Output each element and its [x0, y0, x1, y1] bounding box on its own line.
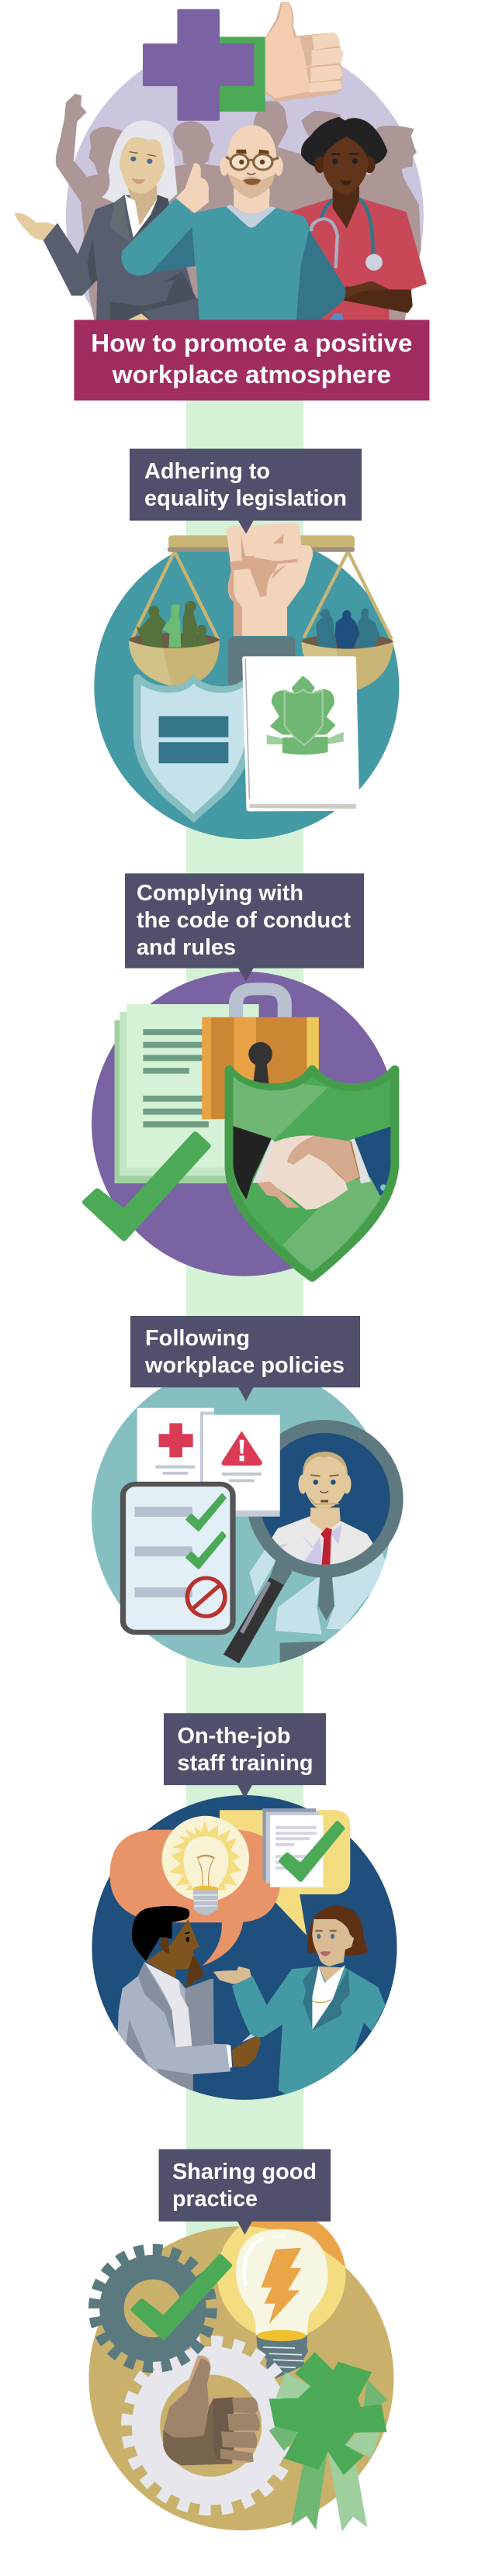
yellow speech bubble	[220, 1810, 350, 1935]
central man giving thumbs up	[121, 125, 345, 319]
orange speech bubble	[110, 1830, 281, 1966]
policies illustration	[92, 1364, 404, 1668]
callout: adhering to equality legislation: Adhering to	[144, 459, 270, 484]
figure in pale coat	[249, 1549, 395, 1666]
training illustration	[92, 1795, 397, 2100]
icon: legislation book	[242, 656, 359, 811]
callout: adhering to equality legislation	[130, 449, 362, 534]
woman in teal suit	[213, 1905, 386, 2094]
icon: dark gear	[94, 2250, 212, 2367]
title banner: How to promote a positive	[91, 330, 412, 357]
callout: complying with code of conduct: and rules	[137, 935, 236, 960]
nurse with stethoscope	[289, 117, 427, 319]
icon: first aid document	[137, 1408, 214, 1484]
icon: green check mark	[85, 1134, 208, 1238]
navy circle	[92, 1795, 397, 2100]
icon: magnifying glass with person	[223, 1420, 404, 1663]
code of conduct illustration	[85, 972, 397, 1278]
orange glow behind bulb	[217, 2211, 346, 2339]
equality illustration	[94, 523, 399, 839]
title banner	[74, 319, 429, 400]
icon: glowing light bulb	[217, 2211, 346, 2378]
callout: sharing good practice	[159, 2150, 331, 2235]
crest emblem	[267, 675, 344, 754]
title banner: workplace atmosphere	[112, 361, 391, 388]
panel: sharing good practice	[88, 2150, 393, 2532]
callout: sharing good practice: practice	[172, 2187, 258, 2212]
icon: large thumbs up	[265, 2, 344, 102]
man with chin in hand	[118, 1906, 261, 2091]
icon: brown thumbs up	[163, 2356, 261, 2465]
callout: complying with code of conduct	[125, 873, 364, 982]
icon: document pages	[115, 1004, 259, 1183]
icon: light bulb idea	[162, 1816, 249, 1915]
icon: balance scales	[129, 535, 393, 690]
purple circle	[92, 972, 397, 1276]
panel: on-the-job staff training	[92, 1713, 397, 2100]
icon: purple and green plus	[143, 9, 265, 121]
icon: light gear	[126, 2341, 295, 2510]
icon: green check	[133, 2257, 230, 2337]
callout: on-the-job staff training: On-the-job	[177, 1724, 290, 1749]
tan circle	[88, 2226, 393, 2530]
pale teal circle	[92, 1364, 392, 1668]
crowd silhouettes	[56, 94, 421, 319]
callout: complying with code of conduct: Complying with	[137, 881, 303, 906]
icon: shield with handshake	[229, 1069, 395, 1278]
callout: sharing good practice: Sharing good	[172, 2160, 317, 2184]
icon: warning document	[200, 1411, 280, 1517]
good practice illustration	[88, 2211, 393, 2532]
panel: complying with code of conduct	[85, 873, 397, 1278]
callout: following workplace policies: workplace policies	[144, 1353, 345, 1378]
icon: raised fist	[227, 523, 313, 686]
panel: header	[14, 2, 429, 401]
green connecting stripe	[186, 400, 303, 2238]
icon: padlock	[202, 989, 319, 1119]
callout: on-the-job staff training	[164, 1713, 326, 1798]
callout: adhering to equality legislation: equality legislation	[144, 486, 347, 511]
callout: following workplace policies: Following	[145, 1326, 250, 1351]
woman in grey suit	[14, 120, 201, 319]
callout: on-the-job staff training: staff training	[177, 1751, 314, 1776]
teal circle	[94, 534, 399, 839]
icon: documents with check	[262, 1808, 343, 1887]
panel: adhering to equality legislation	[94, 449, 399, 839]
icon: equals shield	[133, 674, 254, 823]
callout: complying with code of conduct: the code of conduct	[137, 908, 352, 933]
icon: green rosette	[269, 2352, 387, 2532]
header illustration	[14, 2, 427, 395]
lavender background circle	[66, 37, 424, 395]
panel: following workplace policies	[92, 1316, 404, 1668]
callout: following workplace policies	[130, 1316, 360, 1401]
icon: checklist clipboard	[123, 1484, 233, 1632]
